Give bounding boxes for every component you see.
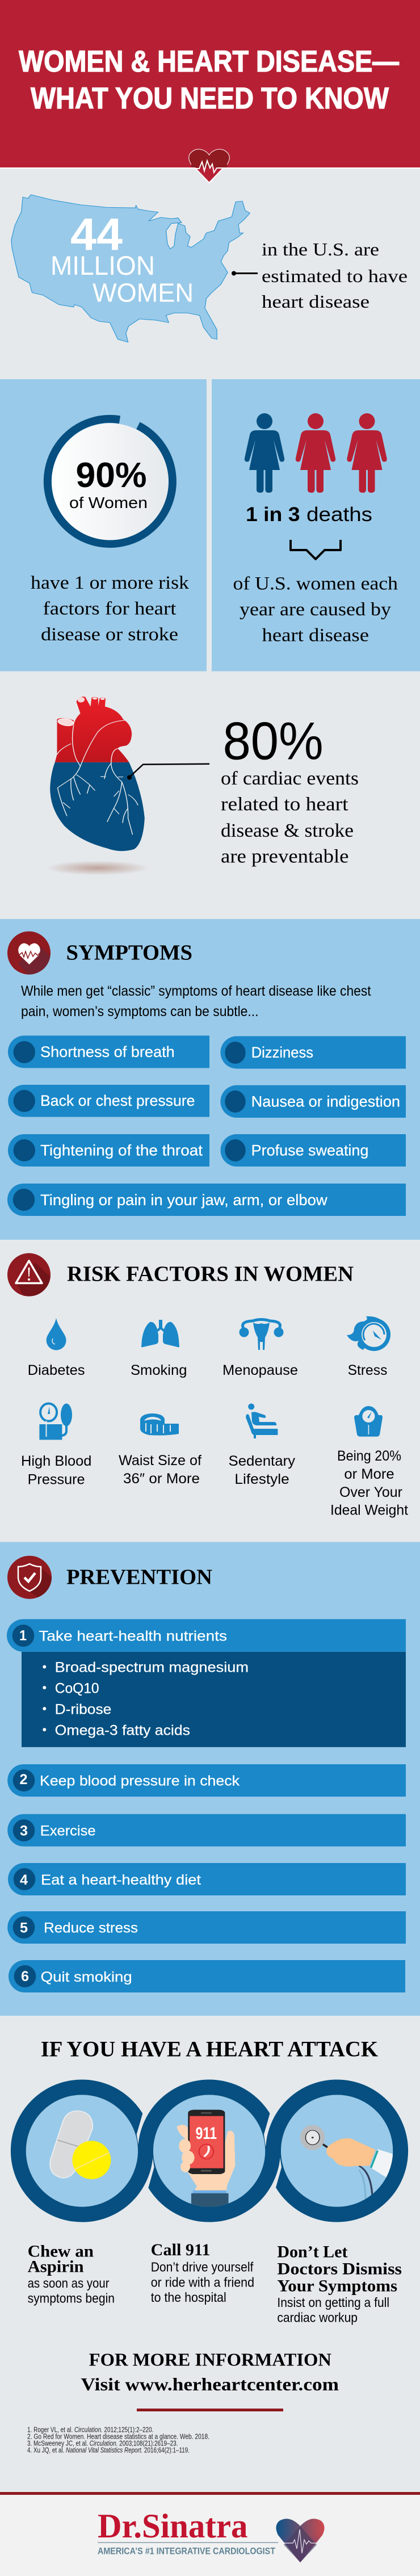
step 6 <box>9 1960 405 1992</box>
callout line <box>127 764 209 780</box>
risk: diabetes: Diabetes <box>28 1362 85 1378</box>
text: call 911 <box>151 2241 254 2305</box>
text: don't let doctors dismiss: Your Symptoms <box>277 2277 397 2296</box>
ring chart: of Women <box>69 494 148 511</box>
icon: scale <box>354 1406 383 1437</box>
more information: Visit www.herheartcenter.com <box>81 2374 339 2394</box>
callout line <box>232 271 258 276</box>
step 1 with list <box>7 1619 406 1747</box>
risk: menopause <box>222 1319 298 1378</box>
list of nutrients <box>43 1660 249 1738</box>
symptom: dizziness <box>220 1036 406 1069</box>
icon: blood pressure gauge <box>39 1403 72 1440</box>
icon: measuring tape <box>140 1413 179 1436</box>
text: 80 percent: are preventable <box>221 846 348 867</box>
text: 80 percent: disease & stroke <box>221 820 354 841</box>
risk: stress <box>347 1316 390 1378</box>
heading: PREVENTION <box>66 1566 212 1589</box>
text: call 911: to the hospital <box>151 2290 226 2305</box>
symptom: dizziness: Dizziness <box>251 1044 313 1061</box>
intro text <box>21 983 371 1020</box>
more information: FOR MORE INFORMATION <box>89 2349 331 2369</box>
risk: waist size <box>119 1413 201 1487</box>
icon: woman blue <box>245 413 284 493</box>
step 3: Exercise <box>40 1823 95 1839</box>
risk: overweight: Ideal Weight <box>330 1503 408 1518</box>
panel: prevention <box>0 1542 420 2016</box>
statistic label: 1 in 3 <box>246 504 300 526</box>
list of nutrients: Broad-spectrum magnesium <box>55 1660 249 1676</box>
text: in the U.S. <box>262 239 408 312</box>
ring chart <box>48 419 173 544</box>
risk: smoking <box>131 1320 187 1378</box>
step 6: 6 <box>21 1969 29 1985</box>
risk: stress: Stress <box>348 1362 387 1378</box>
brace <box>291 540 341 559</box>
header banner <box>0 0 420 169</box>
text: don't let doctors dismiss: cardiac workup <box>277 2310 358 2325</box>
symptom: back or chest pressure <box>8 1085 209 1117</box>
statistic <box>51 209 194 308</box>
map: 44 million women <box>11 195 250 342</box>
heading: RISK FACTORS IN WOMEN <box>67 1262 354 1286</box>
risk: sedentary lifestyle: Lifestyle <box>234 1471 289 1487</box>
phone screen number: 911 <box>195 2124 217 2143</box>
text: call 911: Don’t drive yourself <box>151 2259 254 2274</box>
icon: heart badge <box>7 931 51 975</box>
icon: uterus <box>240 1319 284 1350</box>
risk: sedentary lifestyle: Sedentary <box>228 1453 296 1469</box>
panel: symptoms <box>0 919 420 1240</box>
risk: diabetes <box>28 1318 85 1378</box>
text: chew an aspirin: Chew an <box>28 2242 94 2261</box>
text: chew an aspirin: symptoms begin <box>28 2291 115 2306</box>
text: don't let doctors dismiss: Insist on getting a full <box>277 2295 389 2310</box>
intro text: pain, women’s symptoms can be subtle... <box>21 1004 259 1020</box>
risk: overweight: or More <box>344 1466 394 1482</box>
references: 3. McSweeney JC, et al. Circulation. 2003;108(21):2619–23. <box>27 2439 178 2447</box>
references: 4. Xu JQ, et al. National Vital Statistics Report. 2016;64(2):1–119. <box>27 2445 190 2454</box>
step 5: Reduce stress <box>44 1920 138 1936</box>
step 1 with list: 1 <box>19 1628 27 1644</box>
step 1 with list: Take heart-health nutrients <box>39 1628 227 1644</box>
anatomical heart <box>50 696 145 851</box>
icon: hand with stethoscope <box>300 2125 395 2202</box>
icon: gauge with flames <box>347 1316 390 1351</box>
risk: high blood pressure: High Blood <box>21 1453 91 1469</box>
panel: 1 in 3 deaths <box>212 379 420 671</box>
footer <box>0 2492 420 2576</box>
text: chew an aspirin: as soon as your <box>28 2276 110 2290</box>
text: chew an aspirin <box>28 2242 115 2306</box>
step 4: 4 <box>20 1872 28 1888</box>
step 3: 3 <box>20 1823 28 1839</box>
symptom: shortness of breath <box>8 1035 209 1068</box>
icon: drop <box>47 1318 66 1350</box>
list of nutrients: D-ribose <box>55 1702 111 1718</box>
list of nutrients: Omega-3 fatty acids <box>55 1722 190 1738</box>
risk: overweight: Being 20% <box>337 1448 401 1464</box>
text: chew an aspirin: Aspirin <box>28 2257 84 2276</box>
icon: lungs <box>141 1320 179 1347</box>
step 2: 2 <box>19 1772 27 1788</box>
symptom: profuse sweating <box>220 1134 406 1167</box>
US map <box>11 195 250 342</box>
logo heart <box>276 2519 325 2562</box>
icon: warning badge <box>7 1253 51 1297</box>
text: 80 percent: 80% <box>223 711 324 771</box>
panel text: disease or stroke <box>41 624 178 645</box>
text: don't let doctors dismiss: Doctors Dismiss <box>277 2260 402 2279</box>
intro text: While men get “classic” symptoms of heart disease like chest <box>21 983 371 999</box>
heart illustration <box>45 696 150 875</box>
icon: person sitting <box>246 1403 278 1438</box>
text: in the U.S.: estimated to have <box>262 266 408 286</box>
panel text: year are caused by <box>240 599 392 620</box>
text: don't let doctors dismiss <box>277 2243 402 2325</box>
panel: 90 percent of women <box>0 379 207 671</box>
text: in the U.S.: in the U.S. are <box>262 239 379 259</box>
step 6: Quit smoking <box>41 1969 132 1985</box>
step 4: Eat a heart-healthy diet <box>41 1872 201 1888</box>
icon: aspirin pills <box>50 2111 111 2179</box>
logo: Dr. Sinatra <box>98 2507 325 2562</box>
step 2: Keep blood pressure in check <box>40 1773 240 1789</box>
symptom: tightening of the throat: Tightening of the throat <box>40 1142 203 1159</box>
references: 2. Go Red for Women. Heart disease statistics at a glance. Web. 2018. <box>27 2432 209 2440</box>
text: call 911: Call 911 <box>151 2241 210 2259</box>
statistic label: deaths <box>306 504 372 526</box>
statistic: 44 <box>70 209 123 259</box>
symptom: nausea or indigestion: Nausea or indigestion <box>251 1093 400 1110</box>
heart shadow <box>45 861 150 875</box>
panel text: factors for heart <box>43 598 176 619</box>
panel text <box>31 573 190 645</box>
text: 80 percent <box>221 711 359 867</box>
step 5 <box>7 1911 406 1944</box>
panel text <box>233 574 398 646</box>
symptom: shortness of breath: Shortness of breath <box>40 1043 175 1060</box>
heading: SYMPTOMS <box>66 941 192 965</box>
heading: if you have a heart attack: IF YOU HAVE A HEART ATTACK <box>41 2037 379 2062</box>
risk: waist size: Waist Size of <box>119 1453 201 1469</box>
text: in the U.S.: heart disease <box>262 291 369 312</box>
statistic: WOMEN <box>93 278 194 308</box>
symptom: nausea or indigestion <box>220 1085 406 1118</box>
symptom: back or chest pressure: Back or chest pressure <box>40 1092 195 1109</box>
icon: woman red <box>296 413 335 493</box>
step 5: 5 <box>20 1920 28 1936</box>
ring chart: 90% <box>76 456 146 495</box>
icon: heart with pulse <box>189 149 229 183</box>
icon: shield badge <box>7 1556 54 1601</box>
logo: Dr. Sinatra: Dr.Sinatra <box>98 2507 247 2545</box>
statistic: MILLION <box>51 250 155 280</box>
text: 80 percent: of cardiac events <box>221 768 359 789</box>
icon: hand holding phone <box>177 2110 235 2207</box>
risk: high blood pressure: Pressure <box>28 1471 85 1487</box>
interlocked circles <box>18 2087 401 2214</box>
statistic label <box>246 504 372 526</box>
symptom: profuse sweating: Profuse sweating <box>251 1142 368 1159</box>
risk: overweight <box>330 1406 408 1518</box>
risk: overweight: Over Your <box>339 1484 402 1500</box>
references <box>27 2425 209 2454</box>
text: 80 percent: related to heart <box>221 794 348 815</box>
risk: menopause: Menopause <box>222 1362 298 1378</box>
risk: high blood pressure <box>21 1403 91 1487</box>
risk: smoking: Smoking <box>131 1362 187 1378</box>
symptom: tightening of the throat <box>8 1134 209 1167</box>
title <box>19 45 399 115</box>
panel text: of U.S. women each <box>233 574 398 594</box>
more information <box>81 2349 339 2394</box>
panel text: have 1 or more risk <box>31 573 190 593</box>
references: 1. Roger VL, et al. Circulation. 2012;125(1):2–220. <box>27 2425 153 2434</box>
section: risk factors <box>7 1253 408 1518</box>
step 2 <box>7 1764 406 1797</box>
risk: sedentary lifestyle <box>228 1403 296 1487</box>
step 4 <box>8 1863 406 1895</box>
text: don't let doctors dismiss: Don’t Let <box>277 2243 347 2262</box>
step 3 <box>7 1814 406 1847</box>
icon: woman red <box>347 413 387 493</box>
risk: waist size: 36″ or More <box>123 1471 200 1487</box>
logo: Dr. Sinatra: AMERICA’S #1 INTEGRATIVE CARDIOLOGIST <box>98 2546 275 2556</box>
panel text: heart disease <box>262 626 369 646</box>
text: call 911: or ride with a friend <box>151 2275 254 2289</box>
symptom: tingling or pain <box>7 1184 406 1216</box>
symptom: tingling or pain: Tingling or pain in your jaw, arm, or elbow <box>40 1191 328 1209</box>
list of nutrients: CoQ10 <box>55 1680 99 1696</box>
